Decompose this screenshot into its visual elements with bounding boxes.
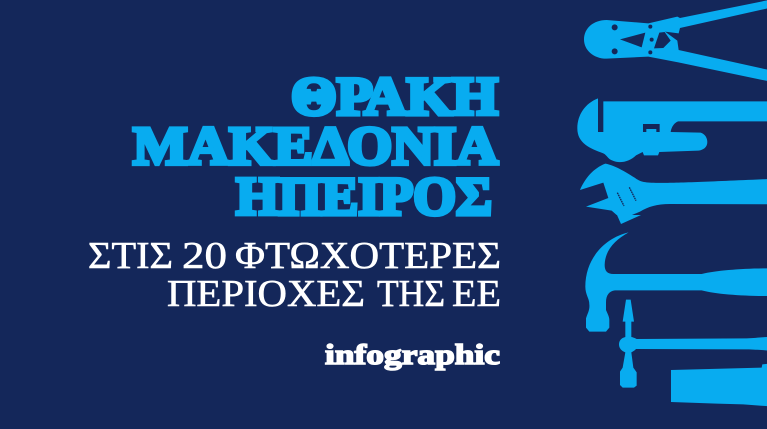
subtitle: 20 bbox=[182, 235, 227, 277]
icon: hand saw bbox=[671, 364, 767, 406]
subtitle: ΤΗΣ bbox=[377, 273, 445, 315]
subtitle: ΕΕ bbox=[452, 273, 501, 315]
title: region names: ΘΡΑΚΗ bbox=[291, 66, 498, 126]
icon: bolt cutter bbox=[584, 0, 767, 81]
subtitle: ΣΤΙΣ bbox=[88, 235, 173, 277]
subtitle: ΠΕΡΙΟΧΕΣ bbox=[167, 273, 365, 315]
subtitle: ΦΤΩΧΟΤΕΡΕΣ bbox=[235, 235, 501, 277]
icon: adjustable wrench jaw tip bbox=[617, 215, 641, 224]
icon: pipe wrench bbox=[577, 98, 767, 162]
title: region names: ΗΠΕΙΡΟΣ bbox=[236, 166, 492, 226]
icon: small pick hammer bbox=[619, 300, 767, 388]
icon: claw hammer bbox=[585, 232, 767, 332]
title: region names: ΜΑΚΕΔΟΝΙΑ bbox=[133, 116, 498, 176]
icon: adjustable wrench bbox=[580, 164, 767, 215]
title: region names bbox=[133, 66, 498, 226]
subtitle bbox=[88, 235, 501, 315]
label: infographic: infographic bbox=[325, 339, 500, 371]
